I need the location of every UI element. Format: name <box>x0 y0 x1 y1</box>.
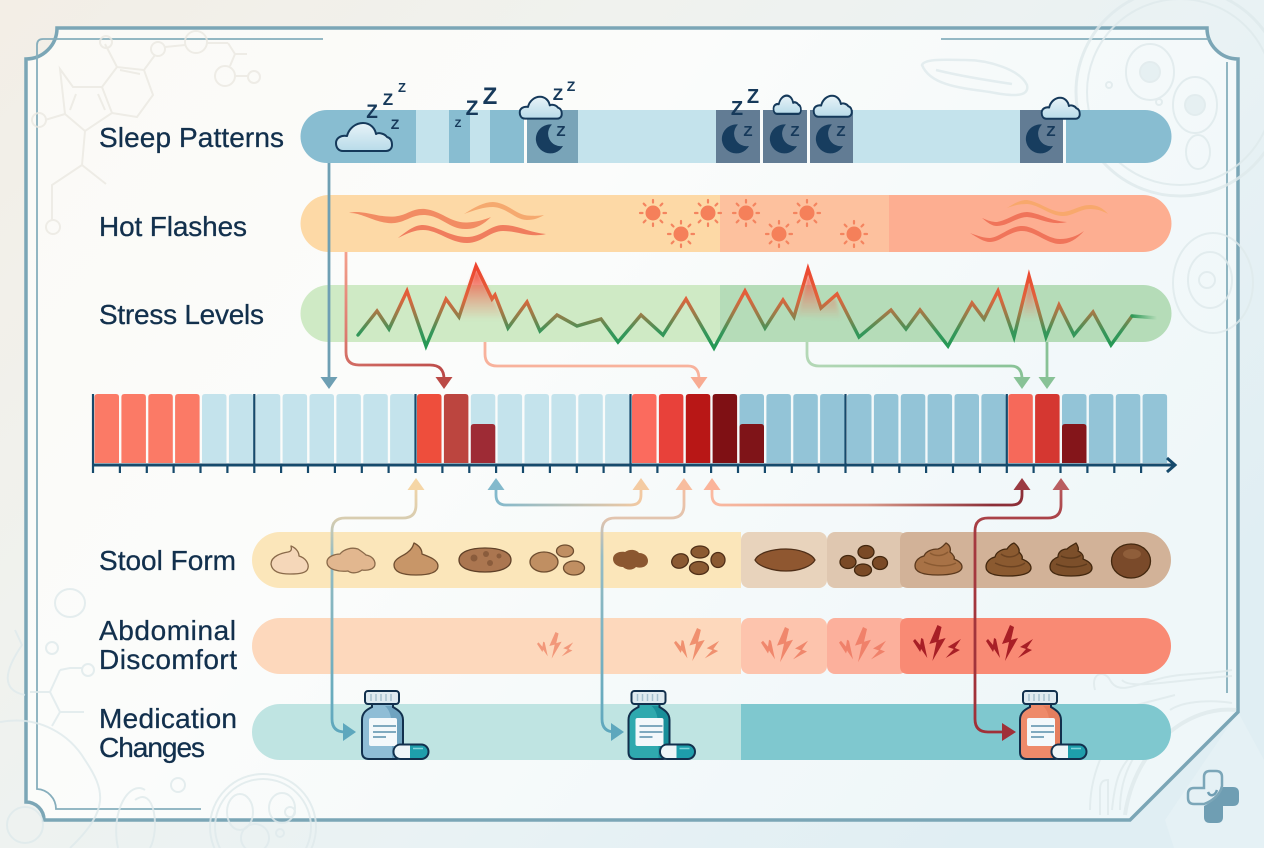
stool 7 <box>670 546 725 574</box>
icons: sleep z letters: Z <box>366 102 378 123</box>
label: Stool Form: Stool Form <box>99 545 236 576</box>
track: abdominal discomfort <box>252 618 1171 674</box>
icons: sleep z letters: Z <box>747 86 759 108</box>
stool 4 <box>459 548 511 572</box>
connectors from lower tracks to timeline <box>332 478 1070 741</box>
track: medication changes <box>252 704 1171 760</box>
stool 8 <box>755 549 815 571</box>
stool 13 <box>1112 544 1150 578</box>
icon: medication bottle 3 <box>1020 691 1086 759</box>
stool 5 <box>530 545 584 575</box>
timeline <box>93 394 1175 473</box>
icons: sleep z letters: Z <box>383 90 393 109</box>
icons: sleep z letters: Z <box>731 98 743 120</box>
label: Medication Changes: Medication <box>99 703 237 734</box>
arrow: sleep to timeline <box>320 163 338 389</box>
icon: medication bottle 2 <box>628 691 695 759</box>
icons: suns <box>640 200 867 247</box>
icons: stool types <box>271 543 1150 578</box>
track: sleep patterns <box>300 78 1172 163</box>
arrow: medication 3 to timeline <box>975 478 1070 741</box>
arrow: stress to timeline, second flare <box>807 342 1030 389</box>
stool 6 <box>613 550 648 570</box>
arrow: timeline recovery link <box>488 478 650 505</box>
line chart: stress <box>358 266 1157 348</box>
icons: moons: Z <box>1046 123 1056 140</box>
icons: moons: Z <box>556 123 566 140</box>
arrow: medication 1 to timeline <box>332 478 424 741</box>
peak glows <box>456 268 1040 322</box>
stool 10 <box>915 543 962 575</box>
stool 9 <box>840 546 888 576</box>
icon: medication bottle 1 <box>362 691 428 759</box>
timeline axis with ticks <box>93 394 1175 473</box>
label: Abdominal Discomfort: Discomfort <box>99 644 237 675</box>
icons: heat waves <box>349 200 1108 244</box>
stool 2 <box>327 548 375 573</box>
icons: sleep z letters: Z <box>567 78 576 94</box>
track: stress levels <box>300 266 1172 348</box>
icons: clouds <box>336 96 1080 151</box>
icons: sleep z letters: Z <box>466 97 479 120</box>
label: Stress Levels: Stress Levels <box>99 299 264 330</box>
stool 12 <box>1050 543 1092 576</box>
arrow: stress to timeline, direct <box>1038 342 1056 389</box>
icons: sleep z letters <box>366 78 759 132</box>
label: Sleep Patterns: Sleep Patterns <box>99 122 284 153</box>
stool 1 <box>271 546 308 574</box>
icons: moons: Z <box>836 123 846 140</box>
icons: sleep z letters: Z <box>553 85 563 104</box>
icons: sleep z letters: Z <box>398 80 406 95</box>
icons: moons: Z <box>790 123 800 140</box>
track: hot flashes <box>301 195 1171 252</box>
connectors from upper tracks to timeline <box>320 163 1056 389</box>
stool 11 <box>986 543 1031 576</box>
icons: sleep z letters: Z <box>483 83 497 110</box>
label: Abdominal Discomfort: Abdominal <box>99 615 236 646</box>
track: stool form <box>252 532 1171 588</box>
arrow: stress to timeline, first flare <box>485 342 708 389</box>
arrow: hot flashes to timeline <box>346 252 452 389</box>
arrow: timeline flare link <box>704 478 1030 505</box>
icons: moons <box>536 123 1056 153</box>
icons: sleep z letters: Z <box>455 118 462 130</box>
label: Medication Changes: Changes <box>99 732 205 763</box>
icons: sleep z letters: Z <box>391 116 400 132</box>
arrow: medication 2 to timeline <box>602 478 692 741</box>
icons: moons: Z <box>743 123 753 140</box>
label: Hot Flashes: Hot Flashes <box>99 211 247 242</box>
stool 3 <box>394 543 438 575</box>
icon: medical cross logo <box>1188 771 1239 823</box>
timeline bars <box>94 394 1167 463</box>
icons: abdominal pain bolts <box>537 625 1033 662</box>
